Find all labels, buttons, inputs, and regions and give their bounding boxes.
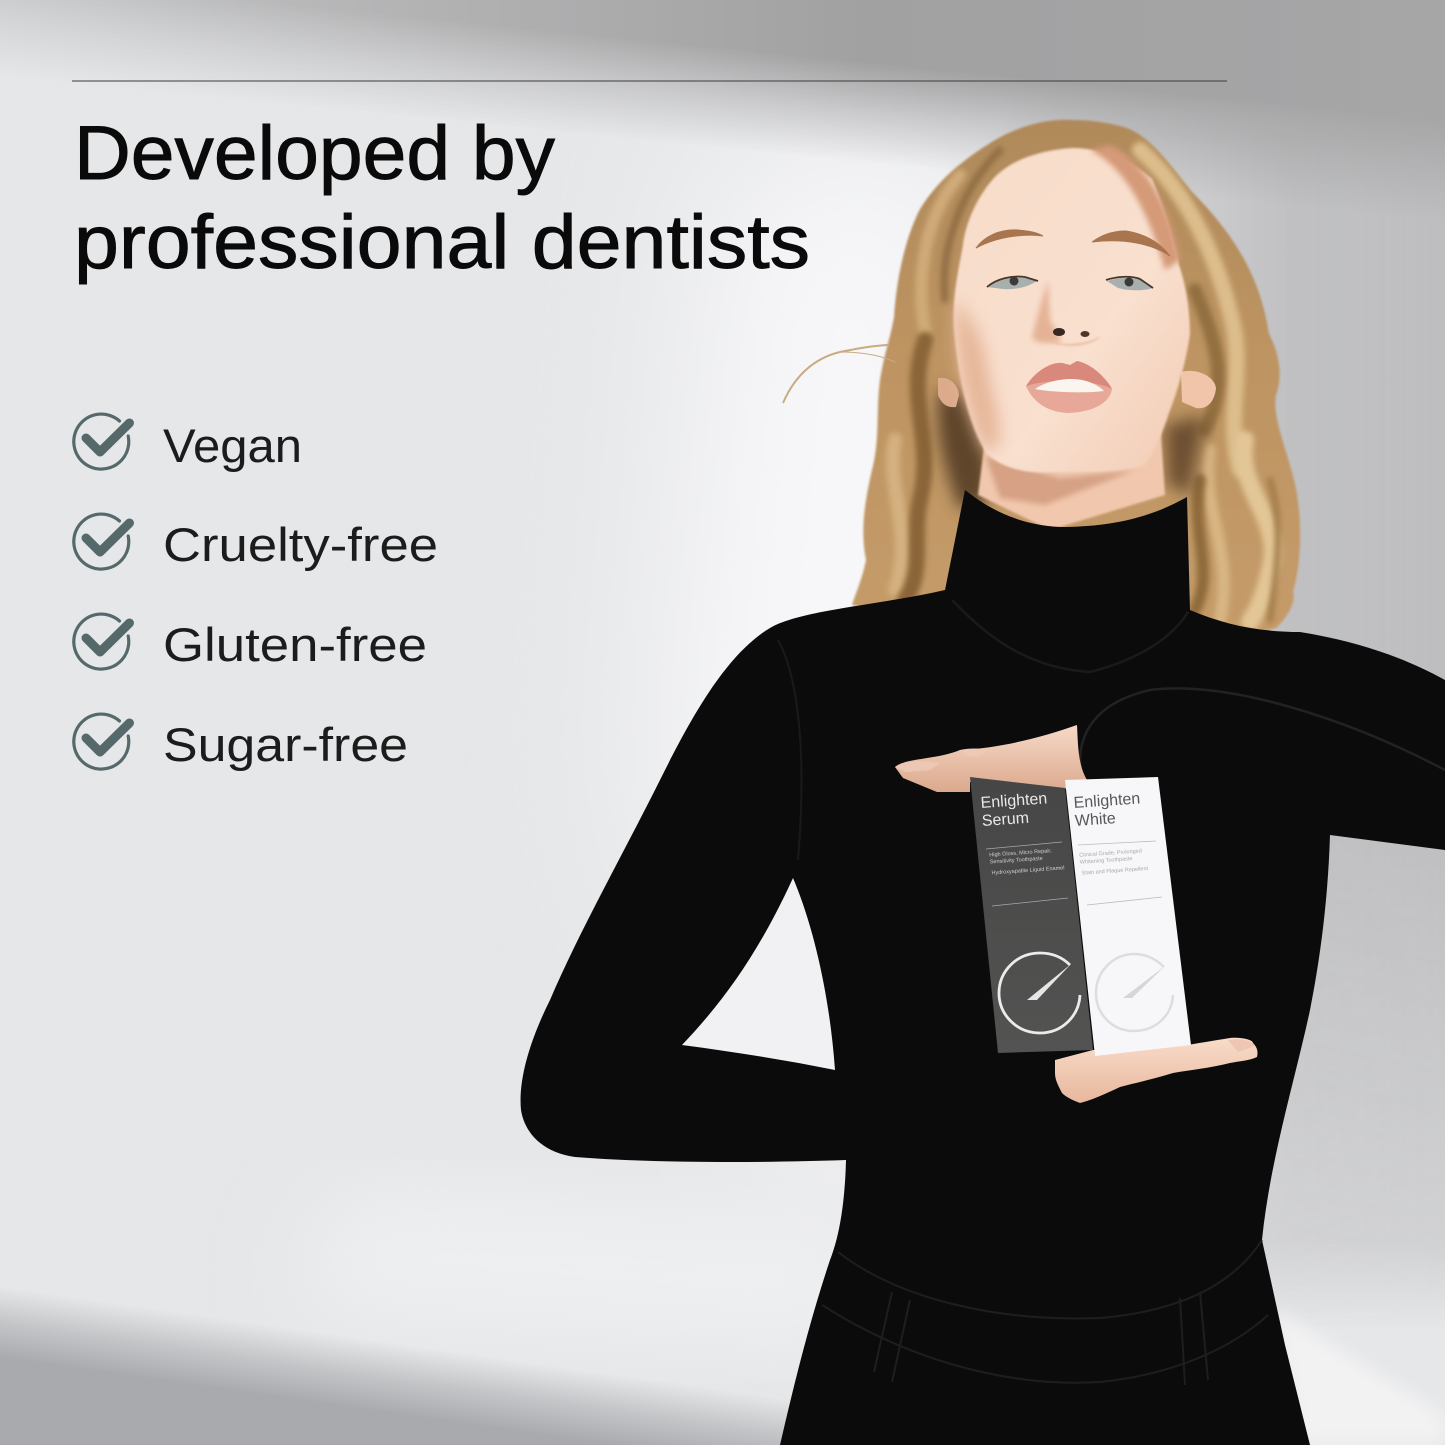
neck bbox=[978, 420, 1165, 530]
product box: Enlighten Serum bbox=[970, 777, 1093, 1053]
shoulder seam bbox=[778, 640, 801, 860]
checklist bbox=[74, 414, 438, 771]
product box: Enlighten Serum: Serum bbox=[981, 810, 1030, 830]
neck shadow bbox=[985, 455, 1135, 505]
icon: check in circle bbox=[74, 614, 130, 669]
belt loop right bbox=[1180, 1292, 1208, 1385]
item: vegan: Vegan bbox=[163, 419, 302, 472]
product box: Enlighten Serum: High Gloss, Micro Repair, bbox=[989, 848, 1052, 859]
icon: check in circle bbox=[74, 514, 130, 569]
eyebrow left bbox=[976, 230, 1043, 248]
item: gluten-free bbox=[74, 614, 427, 671]
hair lowlights bbox=[905, 150, 1278, 620]
item: gluten-free: Gluten-free bbox=[163, 618, 427, 671]
cheek shadow bbox=[955, 300, 1000, 450]
top rule bbox=[72, 80, 1227, 82]
item: cruelty-free: Cruelty-free bbox=[163, 518, 438, 571]
hair shadow on forehead bbox=[1090, 145, 1180, 270]
bottom hand bbox=[1055, 1038, 1258, 1103]
dark hair behind jaw left bbox=[938, 390, 990, 510]
title: professional dentists bbox=[74, 200, 810, 285]
ear left bbox=[938, 378, 959, 407]
product box: Enlighten White bbox=[1065, 777, 1191, 1056]
icon: check in circle bbox=[74, 714, 130, 769]
ear right bbox=[1181, 371, 1216, 408]
gap between arm and torso bbox=[682, 878, 835, 1070]
waistband lower edge bbox=[822, 1305, 1268, 1383]
hair bbox=[783, 120, 1300, 640]
eye right bbox=[1106, 277, 1153, 290]
product box: Enlighten White: Stain and Plaque Repellent bbox=[1081, 866, 1149, 877]
fingernail bbox=[895, 761, 940, 772]
product box: Enlighten White: Clinical Grade, Prolonged bbox=[1079, 848, 1142, 859]
product box: Enlighten White: Whitening Toothpaste bbox=[1080, 856, 1133, 866]
nose bbox=[1032, 280, 1100, 346]
black sweater body and arms bbox=[521, 490, 1445, 1445]
eyebrow right bbox=[1092, 231, 1170, 256]
belt loop left bbox=[874, 1292, 910, 1382]
sleeve edge line bbox=[1080, 688, 1445, 780]
woman holding products bbox=[521, 120, 1445, 1445]
lips bbox=[1026, 361, 1112, 413]
title bbox=[74, 111, 810, 285]
product box: Enlighten Serum: Sensitivity Toothpaste bbox=[990, 856, 1043, 866]
stray hair strands bbox=[783, 345, 895, 403]
trouser waistband bbox=[838, 1240, 1262, 1318]
item: sugar-free bbox=[74, 714, 408, 771]
product box: Enlighten White: White bbox=[1074, 810, 1116, 830]
collar fold bbox=[952, 600, 1188, 672]
product box: Enlighten Serum: Hydroxyapatite Liquid Enamel bbox=[991, 865, 1065, 876]
hair highlights bbox=[893, 150, 1273, 622]
item: vegan bbox=[74, 414, 302, 472]
product box: Enlighten Serum: Enlighten bbox=[980, 790, 1048, 812]
top hand bbox=[895, 725, 1087, 792]
dark hair behind jaw right bbox=[1165, 415, 1205, 495]
logo e serum bbox=[999, 953, 1080, 1033]
product box: Enlighten White: Enlighten bbox=[1073, 790, 1141, 812]
fingernail bbox=[960, 748, 988, 757]
icon: check in circle bbox=[74, 414, 130, 469]
item: sugar-free: Sugar-free bbox=[163, 718, 408, 771]
title: Developed by bbox=[74, 111, 555, 196]
thumb nail bbox=[1228, 1039, 1255, 1052]
logo e white bbox=[1096, 954, 1173, 1031]
eye left bbox=[987, 276, 1038, 289]
face bbox=[953, 145, 1190, 472]
item: cruelty-free bbox=[74, 514, 438, 571]
